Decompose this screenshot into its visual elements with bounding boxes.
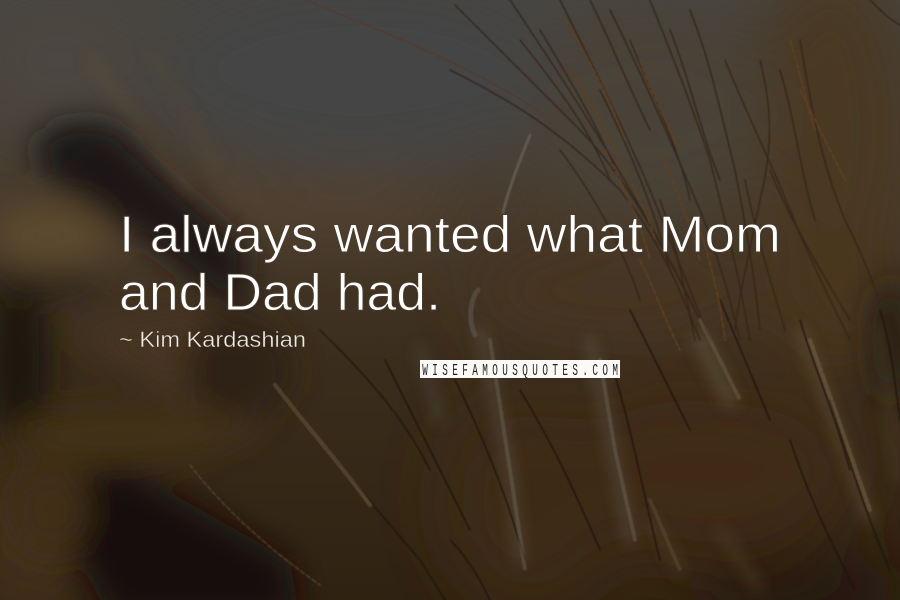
quote text: I always wanted what Mom <box>119 206 781 264</box>
grass stems <box>190 0 900 600</box>
quote text: and Dad had. <box>119 264 441 322</box>
author attribution: ~ Kim Kardashian <box>119 327 306 352</box>
